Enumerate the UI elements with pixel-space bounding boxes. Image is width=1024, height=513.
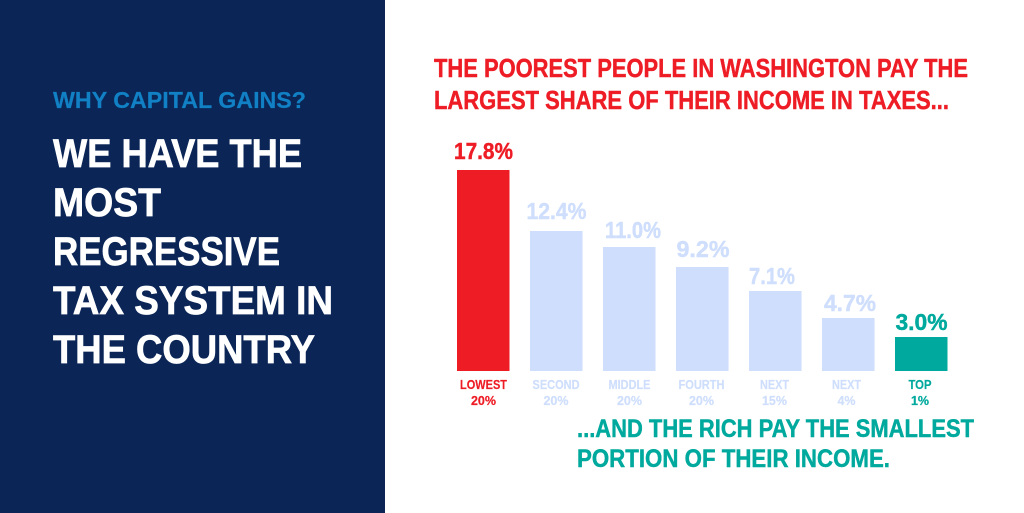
bar: next 15%: 15% <box>762 394 787 408</box>
bar: top 1%: 1% <box>911 394 929 408</box>
bar: middle 20%: 11.0% <box>605 217 661 243</box>
eyebrow: why capital gains: WHY CAPITAL GAINS? <box>53 87 306 113</box>
bar: fourth 20% <box>676 236 730 408</box>
panel: left navy panel <box>0 0 385 513</box>
bar: middle 20%: 20% <box>617 394 642 408</box>
bar: top 1%: TOP <box>908 378 932 392</box>
bar: second 20%: 12.4% <box>526 198 586 224</box>
bar: next 15%: NEXT <box>760 378 789 392</box>
heading: poorest people <box>434 53 968 115</box>
bar: next 15% <box>749 263 802 408</box>
title: TAX SYSTEM IN <box>53 279 333 323</box>
bar: lowest 20%: 20% <box>471 394 496 408</box>
bar: next 15%: 7.1% <box>749 263 795 289</box>
bar chart <box>454 138 948 408</box>
bar: next 4%: NEXT <box>832 378 861 392</box>
bar: lowest 20%: 17.8% <box>454 138 513 164</box>
title: MOST <box>53 181 161 225</box>
callout: rich pay smallest: PORTION OF THEIR INCOME. <box>577 445 890 473</box>
title: WE HAVE THE <box>53 132 302 176</box>
bar: next 4%: 4.7% <box>824 290 876 316</box>
bar: fourth 20%: FOURTH <box>678 378 724 392</box>
bar: fourth 20%: 9.2% <box>676 236 730 262</box>
callout: rich pay smallest: ...AND THE RICH PAY THE SMALLEST <box>577 415 974 443</box>
bar: top 1%: 3.0% <box>896 309 948 335</box>
title: REGRESSIVE <box>53 230 280 274</box>
bar: middle 20% <box>603 217 661 408</box>
title: THE COUNTRY <box>53 328 315 372</box>
bar: second 20%: SECOND <box>532 378 580 392</box>
bar: second 20% <box>526 198 586 408</box>
bar: middle 20%: MIDDLE <box>608 378 650 392</box>
bar: top 1% <box>895 309 948 408</box>
bar: second 20%: 20% <box>543 394 569 408</box>
title <box>53 132 333 372</box>
bar: lowest 20% <box>454 138 513 408</box>
bar: next 4% <box>822 290 876 408</box>
bar: next 4%: 4% <box>837 394 856 408</box>
bar: lowest 20%: LOWEST <box>460 378 507 392</box>
bar: fourth 20%: 20% <box>689 394 714 408</box>
callout: rich pay smallest <box>577 415 974 473</box>
